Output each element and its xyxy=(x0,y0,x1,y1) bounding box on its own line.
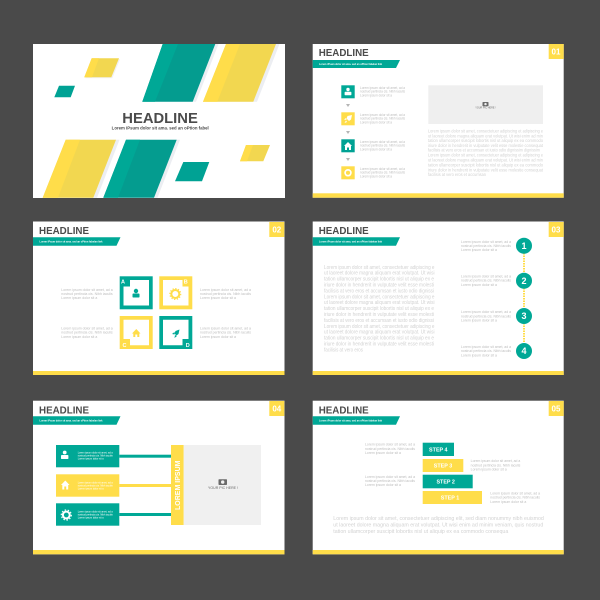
picture placeholder xyxy=(184,445,261,525)
arrow xyxy=(346,158,350,161)
shape: small teal right xyxy=(175,162,209,181)
list text 1: nostrud pertincia cis. Nibh iaculis xyxy=(360,90,405,94)
shape: small yellow top xyxy=(84,58,120,78)
step 2: STEP 2 xyxy=(436,480,455,486)
text step 2 xyxy=(365,475,415,487)
tile B: B xyxy=(184,280,188,286)
paragraph: tation ullamcorper suscipit lobortis nisl ut aliquip ex ea commodo consequa xyxy=(333,529,508,535)
box 3: Lorem ipsum dolor sit a xyxy=(78,515,104,519)
step text 4: nostrud pertincia cis. Nibh iaculis xyxy=(461,349,511,353)
text step 3: Lorem ipsum dolor sit a xyxy=(471,467,507,471)
box 3 xyxy=(56,503,119,526)
tile C: C xyxy=(123,343,127,349)
paragraph: facilisis at vero eros xyxy=(324,347,363,353)
paragraph: Lorem ipsum dolor sit amet, consectetuer adipiscing et adipiscing e xyxy=(428,152,543,158)
step text 3: Lorem ipsum dolor sit a xyxy=(461,318,497,322)
icon: rocket xyxy=(341,112,355,125)
text step 2: nostrud pertincia cis. Nibh iaculis xyxy=(365,479,415,483)
connectors xyxy=(119,455,171,516)
list text 4: Lorem ipsum dolor sit amet, ad a xyxy=(360,167,405,171)
shape: bottom teal parallelogram xyxy=(103,140,180,198)
icon: home xyxy=(341,139,355,152)
tile B xyxy=(159,276,192,309)
box 3: Lorem ipsum dolor sit amet, ad a xyxy=(78,509,113,513)
text step 3: Lorem ipsum dolor sit amet, ad a xyxy=(471,459,521,463)
text step 1: nostrud pertincia cis. Nibh iaculis xyxy=(490,495,540,499)
paragraph: facilisis at vero eros et accumsan et iusto odio dignissim dignissim xyxy=(428,148,540,153)
text bottom right: Lorem ipsum dolor sit amet, ad a xyxy=(200,326,251,330)
step circle 3: 3 xyxy=(521,311,527,321)
text bottom left: Lorem ipsum dolor sit amet, ad a xyxy=(61,326,113,330)
list text 2: nostrud pertincia cis. Nibh iaculis xyxy=(360,117,405,121)
step circle 1: 1 xyxy=(521,241,527,251)
page badge: 04 xyxy=(272,404,282,414)
page badge xyxy=(549,401,564,416)
ribbon: Lorem iPsum dolor sit ama. sed an oPtion fabelan link xyxy=(319,62,382,66)
box 1: nostrud pertincia cis. Nibh iaculis xyxy=(78,454,113,458)
list text 4: Lorem ipsum dolor sit a xyxy=(360,174,392,178)
step 1 xyxy=(423,491,482,504)
list text 1 xyxy=(360,86,405,97)
paragraph: tation ullamcorper suscipit lobortis nisl ut aliquip ex ea commodo xyxy=(428,138,543,143)
step 4 xyxy=(423,443,454,456)
page badge xyxy=(549,44,564,59)
page badge xyxy=(549,222,564,237)
step text 3 xyxy=(461,310,511,322)
ribbon xyxy=(313,237,400,246)
text step 4: Lorem ipsum dolor sit a xyxy=(365,451,401,455)
paragraph: tation ullamcorper suscipit lobortis nisl ut aliquip ex ea commodo xyxy=(428,162,543,168)
ribbon xyxy=(313,416,400,425)
paragraph: ut laoreet dolore magna aliquam erat volutpat. Ut wisi xyxy=(324,300,434,306)
shape: small yellow right xyxy=(240,145,270,161)
step 1: STEP 1 xyxy=(441,496,459,502)
vertical label bar: LOREM IPSUM xyxy=(173,460,182,510)
text step 4: Lorem ipsum dolor sit amet, ad a xyxy=(365,442,415,446)
list text 4 xyxy=(360,167,405,178)
list text 3: nostrud pertincia cis. Nibh iaculis xyxy=(360,144,405,148)
paragraph: iriure dolor in hendrerit in vulputate velit esse molestie consequat xyxy=(428,167,544,172)
box 1: Lorem ipsum dolor sit a xyxy=(78,457,104,461)
paragraph: ut laoreet dolore magna aliquam erat volutpat. Ut wisi enim ad min xyxy=(428,158,543,162)
step text 2: Lorem ipsum dolor sit a xyxy=(461,283,497,287)
shape: small teal left xyxy=(54,86,75,97)
paragraph: iriure dolor in hendrerit in vulputate velit esse molesti xyxy=(324,282,434,288)
panel: cover slide xyxy=(33,44,285,198)
step text 1: Lorem ipsum dolor sit amet, ad a xyxy=(461,240,511,244)
text step 1: Lorem ipsum dolor sit amet, ad a xyxy=(490,491,540,495)
panel: slide 01 xyxy=(313,44,564,198)
paragraph xyxy=(428,128,544,177)
list text 4: nostrud pertincia cis. Nibh iaculis xyxy=(360,171,405,175)
heading: HEADLINE xyxy=(319,47,369,59)
ribbon: Lorem iPsum dolor sit ama. sed an oPtion fabelan link xyxy=(40,418,103,422)
text bottom left: Lorem ipsum dolor sit a xyxy=(61,335,98,339)
text top left: Lorem ipsum dolor sit a xyxy=(61,296,98,300)
vertical label bar xyxy=(171,445,184,525)
text top right: Lorem ipsum dolor sit amet, ad a xyxy=(200,288,251,292)
ribbon: Lorem iPsum dolor sit ama. sed an oPtion fabelan link xyxy=(319,240,382,244)
step circle 4: 4 xyxy=(521,346,527,356)
list text 2: Lorem ipsum dolor sit a xyxy=(360,120,392,124)
panel: slide 05 xyxy=(313,401,564,554)
text bottom right xyxy=(200,326,251,339)
text bottom right: Lorem ipsum dolor sit a xyxy=(200,335,236,339)
box 2 xyxy=(56,474,119,497)
step text 2: nostrud pertincia cis. Nibh iaculis xyxy=(461,278,511,282)
panel: slide 03 xyxy=(313,222,564,375)
subtitle: Lorem iPsum dolor sit ama. sed an oPtion fabel xyxy=(112,125,209,130)
heading: HEADLINE xyxy=(39,225,89,237)
footer bar xyxy=(33,550,284,554)
paragraph: facilisis at vero eros et accumsan et iusto odio dignissi xyxy=(324,318,434,324)
list text 3: Lorem ipsum dolor sit amet, ad a xyxy=(360,140,405,144)
paragraph: tation ullamcorper suscipit lobortis nisl ut aliquip ex e xyxy=(324,306,434,312)
step circle 3 xyxy=(516,308,532,324)
paragraph: facilisis at vero eros et accumsan et iusto odio dignissi xyxy=(324,288,434,294)
shape: bottom yellow parallelogram xyxy=(43,140,120,198)
text step 4: nostrud pertincia cis. Nibh iaculis xyxy=(365,447,415,451)
paragraph: iriure dolor in hendrerit in vulputate velit esse molesti xyxy=(324,342,434,348)
paragraph: Lorem ipsum dolor sit amet, consectetuer adipiscing elit, sed diam nonummy nibh euismod xyxy=(333,516,544,522)
list text 3: Lorem ipsum dolor sit a xyxy=(360,147,392,151)
icon: person xyxy=(341,85,355,98)
step text 2 xyxy=(461,274,511,287)
paragraph: ut laoreet dolore magna aliquam erat volutpat. Ut wisi enim ad minim veniam, quis nostrud xyxy=(333,522,543,528)
step text 1: Lorem ipsum dolor sit a xyxy=(461,248,497,252)
paragraph: tation ullamcorper suscipit lobortis nisl ut aliquip ex e xyxy=(324,336,434,342)
footer bar xyxy=(313,550,564,554)
page badge xyxy=(269,222,284,237)
text top left: nostrud pertincia cis. Nibh iaculis xyxy=(61,292,113,296)
page badge: 02 xyxy=(272,226,282,234)
step text 4: Lorem ipsum dolor sit amet, ad a xyxy=(461,345,511,349)
step 4: STEP 4 xyxy=(429,448,448,454)
step circle 2 xyxy=(516,273,532,289)
ribbon: Lorem iPsum dolor sit ama. sed an oPtion fabelan link xyxy=(40,240,103,244)
step text 4 xyxy=(461,345,511,357)
panel: slide 02 xyxy=(33,222,284,375)
box 2: Lorem ipsum dolor sit amet, ad a xyxy=(78,480,113,484)
timeline connector xyxy=(523,253,525,344)
shape: top yellow parallelogram xyxy=(203,44,280,102)
paragraph xyxy=(324,265,435,353)
text bottom left xyxy=(61,326,113,339)
step circle 1 xyxy=(516,238,532,254)
picture placeholder xyxy=(428,85,543,124)
tile D xyxy=(159,316,192,349)
list text 1: Lorem ipsum dolor sit amet, ad a xyxy=(360,86,405,90)
text step 3: nostrud pertincia cis. Nibh iaculis xyxy=(471,463,521,467)
panel: slide 04 xyxy=(33,401,284,554)
ribbon xyxy=(33,416,120,425)
list text 2: Lorem ipsum dolor sit amet, ad a xyxy=(360,113,405,117)
page badge xyxy=(269,401,284,416)
title: HEADLINE xyxy=(122,110,198,127)
box 1: Lorem ipsum dolor sit amet, ad a xyxy=(78,451,113,455)
text top left xyxy=(61,288,113,300)
picture placeholder: YOUR PIC HERE ! xyxy=(208,486,238,490)
step 3 xyxy=(423,459,463,472)
footer bar xyxy=(313,371,564,375)
step text 3: nostrud pertincia cis. Nibh iaculis xyxy=(461,314,511,318)
box 3: nostrud pertincia cis. Nibh iaculis xyxy=(78,512,113,516)
step text 1 xyxy=(461,240,511,252)
paragraph: Lorem ipsum dolor sit amet, consectetuer adipiscing e xyxy=(324,294,435,300)
text bottom right: nostrud pertincia cis. Nibh iaculis xyxy=(200,330,251,334)
page badge: 01 xyxy=(552,48,561,56)
paragraph: Lorem ipsum dolor sit amet, consectetuer adipiscing e xyxy=(324,324,435,330)
text step 1 xyxy=(490,491,540,504)
heading: HEADLINE xyxy=(319,225,369,237)
step text 4: Lorem ipsum dolor sit a xyxy=(461,353,497,357)
ribbon xyxy=(33,237,120,246)
paragraph: ut laoreet dolore magna aliquam erat volutpat. Ut wisi enim ad min xyxy=(428,133,543,138)
text top right xyxy=(200,288,251,300)
tile C xyxy=(120,316,153,349)
shape: top teal parallelogram xyxy=(142,44,218,102)
paragraph: ut laoreet dolore magna aliquam erat volutpat. Ut wisi xyxy=(324,271,434,277)
text step 3 xyxy=(471,459,521,471)
page badge: 03 xyxy=(552,226,561,234)
paragraph: iriure dolor in hendrerit in vulputate velit esse molesti xyxy=(324,312,434,318)
ribbon: Lorem iPsum dolor sit ama. sed an oPtion fabelan link xyxy=(319,418,382,422)
icon: gear xyxy=(341,166,355,179)
box 2: nostrud pertincia cis. Nibh iaculis xyxy=(78,483,113,487)
step circle 4 xyxy=(516,343,532,359)
paragraph: tation ullamcorper suscipit lobortis nisl ut aliquip ex e xyxy=(324,277,434,283)
text step 2: Lorem ipsum dolor sit amet, ad a xyxy=(365,475,415,479)
list text 3 xyxy=(360,140,405,151)
step text 2: Lorem ipsum dolor sit amet, ad a xyxy=(461,274,511,278)
picture placeholder: YOUR PIC HERE ! xyxy=(475,106,496,110)
paragraph: Lorem ipsum dolor sit amet, consectetuer adipiscing e xyxy=(324,265,435,271)
step text 3: Lorem ipsum dolor sit amet, ad a xyxy=(461,310,511,314)
paragraph: Lorem ipsum dolor sit amet, consectetuer adipiscing et adipiscing e xyxy=(428,128,543,134)
text top right: Lorem ipsum dolor sit a xyxy=(200,296,236,300)
page badge: 05 xyxy=(552,404,561,414)
arrow xyxy=(346,131,350,134)
box 1 xyxy=(56,445,119,467)
step 3: STEP 3 xyxy=(434,464,452,470)
ribbon xyxy=(313,60,400,68)
arrow xyxy=(346,104,350,107)
footer bar xyxy=(33,371,284,375)
tile A: A xyxy=(121,280,125,286)
paragraph xyxy=(333,516,544,535)
list text 1: Lorem ipsum dolor sit a xyxy=(360,93,392,97)
text bottom left: nostrud pertincia cis. Nibh iaculis xyxy=(61,330,113,334)
paragraph: ut laoreet dolore magna aliquam erat volutpat. Ut wisi xyxy=(324,330,434,336)
step circle 2: 2 xyxy=(521,276,527,286)
list text 2 xyxy=(360,113,405,124)
paragraph: facilisis at vero eros et accumsan xyxy=(428,172,486,177)
step text 1: nostrud pertincia cis. Nibh iaculis xyxy=(461,244,511,248)
box 2: Lorem ipsum dolor sit a xyxy=(78,486,104,490)
step 2 xyxy=(423,475,473,488)
text top left: Lorem ipsum dolor sit amet, ad a xyxy=(61,288,113,292)
paragraph: iriure dolor in hendrerit in vulputate velit esse molestie consequat xyxy=(428,143,544,148)
text step 4 xyxy=(365,442,415,455)
footer bar xyxy=(313,193,564,198)
tile D: D xyxy=(186,343,190,349)
tile A xyxy=(120,276,153,309)
text top right: nostrud pertincia cis. Nibh iaculis xyxy=(200,292,251,296)
heading: HEADLINE xyxy=(39,404,89,416)
text step 2: Lorem ipsum dolor sit a xyxy=(365,483,401,487)
text step 1: Lorem ipsum dolor sit a xyxy=(490,500,527,504)
heading: HEADLINE xyxy=(319,404,369,416)
